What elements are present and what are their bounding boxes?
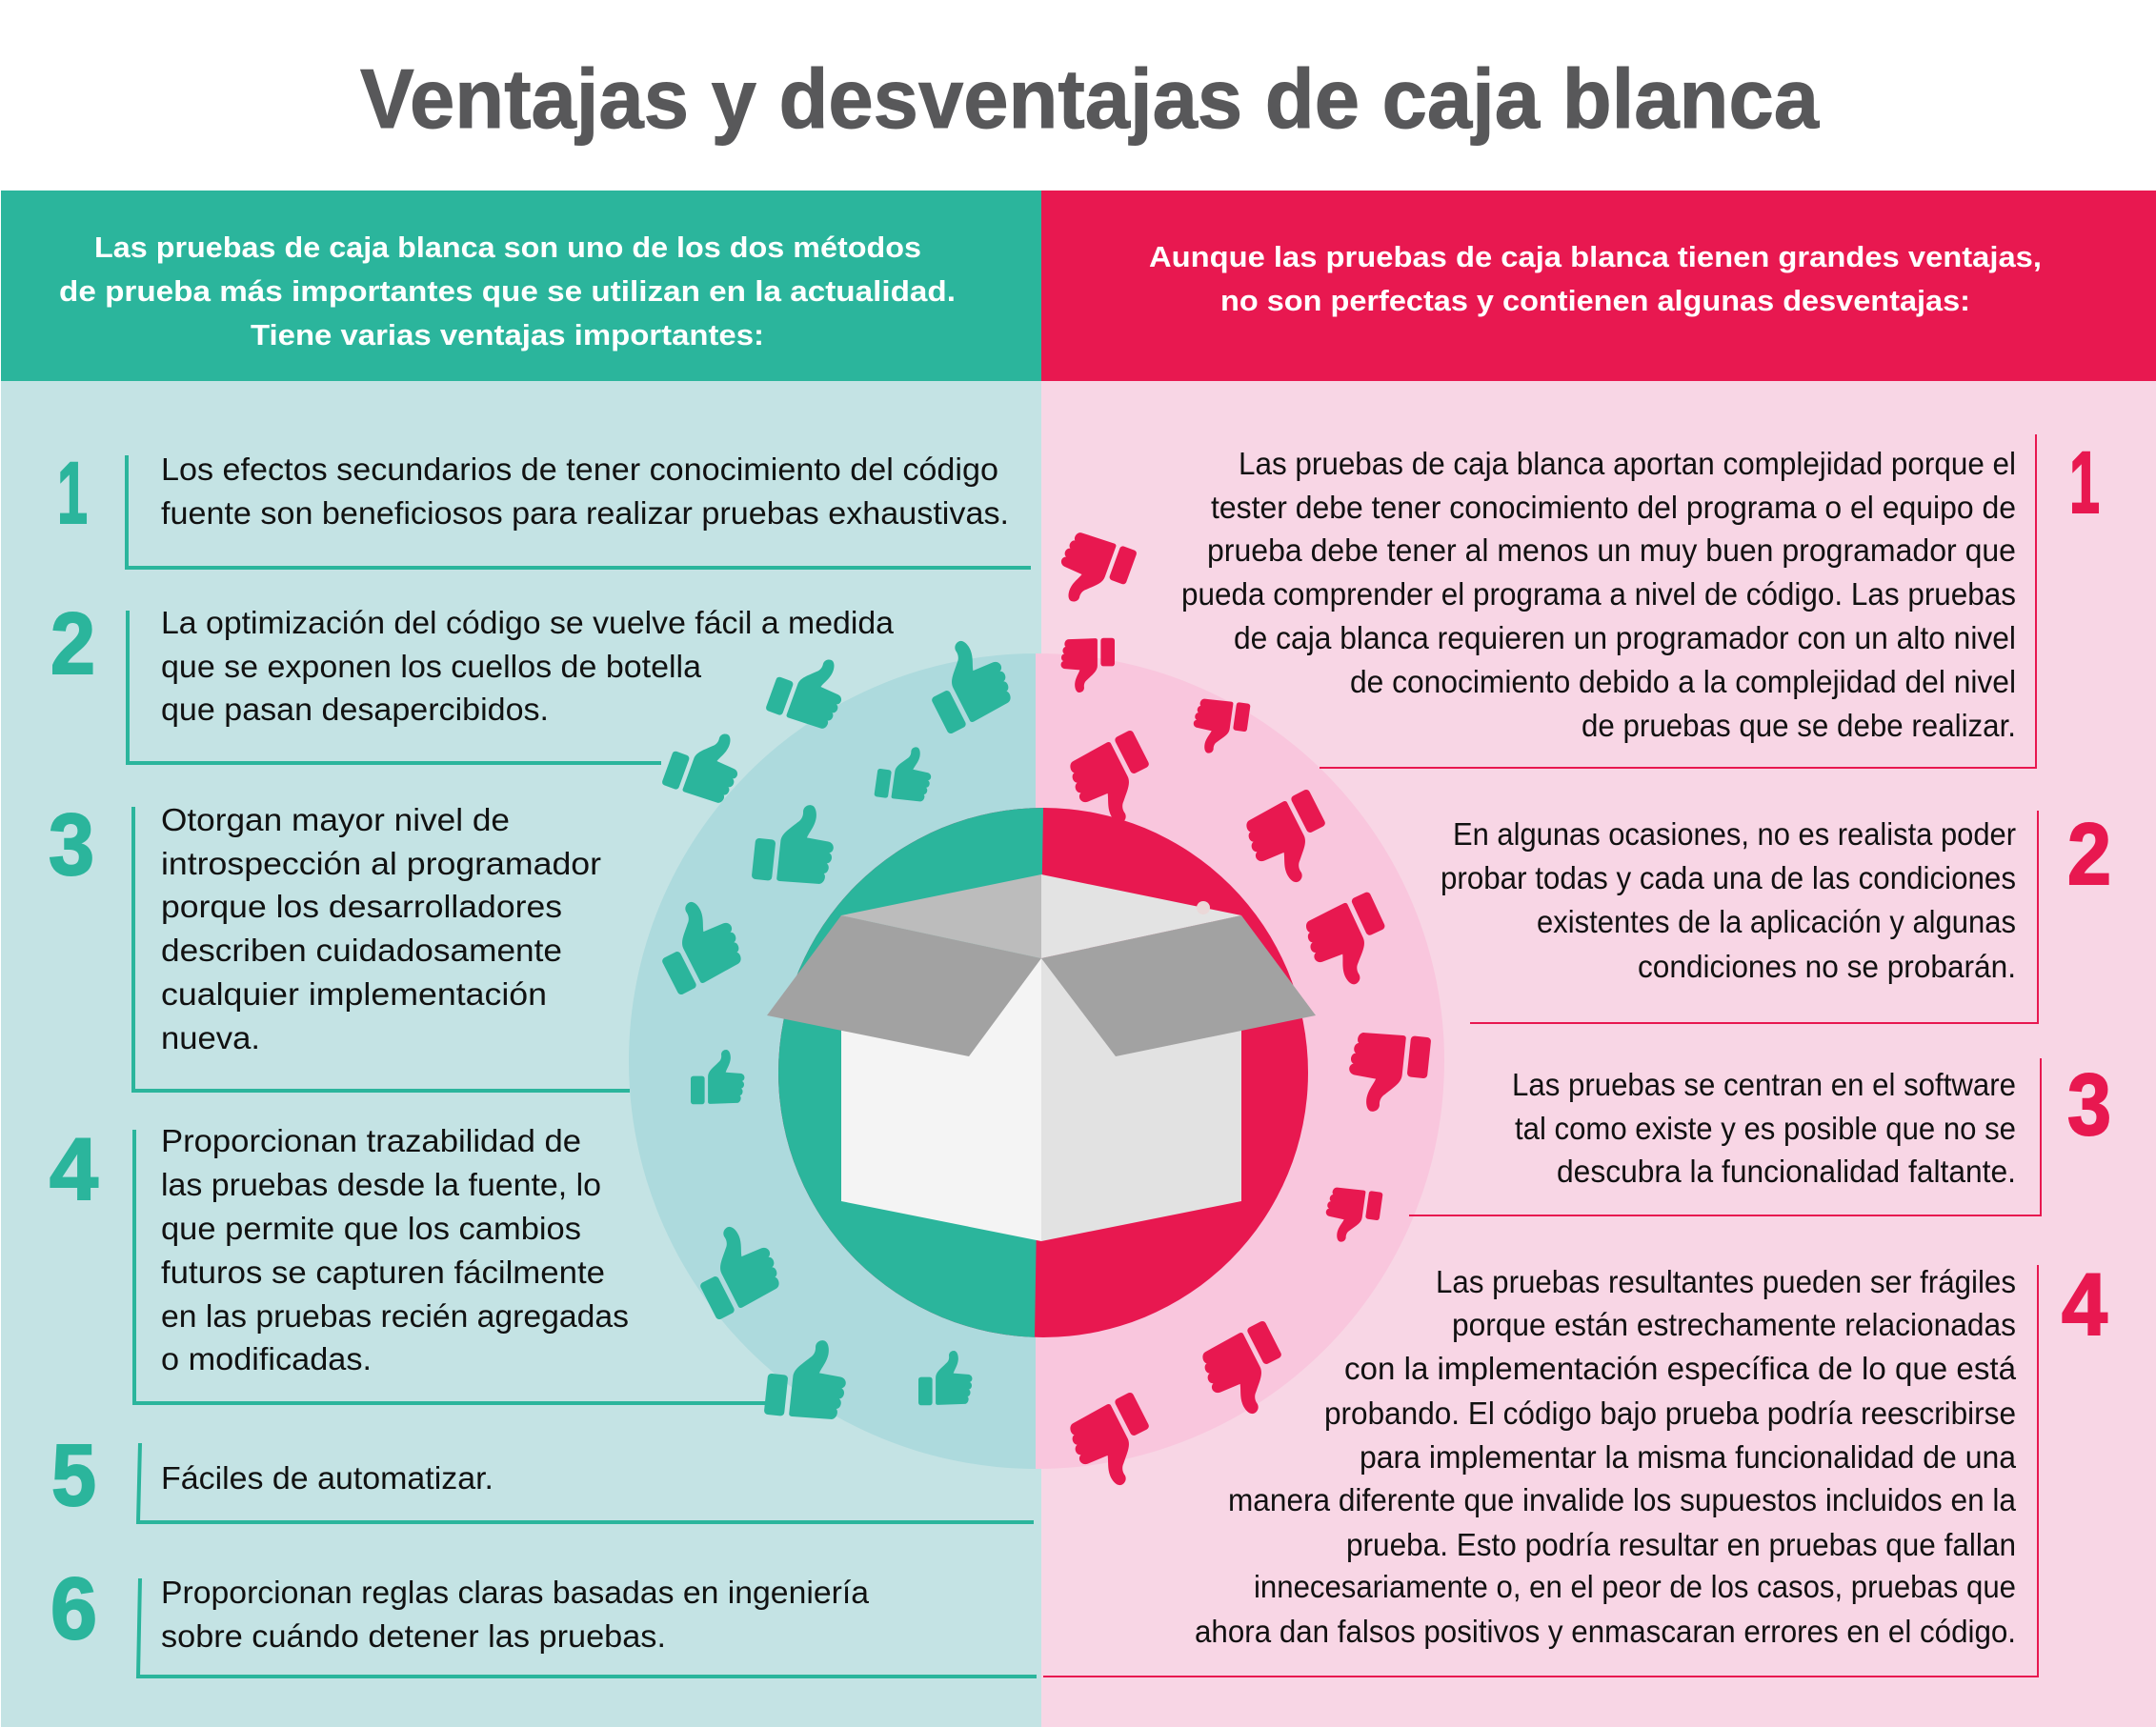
panel: disadvantages header: Aunque las pruebas de caja blanca tienen grandes ventajas, xyxy=(1149,240,2042,273)
text: disadvantage 4: con la implementación específica de lo que está xyxy=(1344,1351,2017,1386)
bracket: disadvantage 4 xyxy=(1043,1265,2038,1677)
text: advantage 1: Los efectos secundarios de tener conocimiento del código xyxy=(161,452,998,487)
icon: thumbs down 4 xyxy=(1062,730,1167,834)
icon: thumbs up 7 xyxy=(691,1050,744,1104)
text: disadvantage 3: Las pruebas se centran en el software xyxy=(1512,1067,2016,1102)
number 2 right: 2 xyxy=(2067,806,2111,903)
text: disadvantage 4: Las pruebas resultantes pueden ser frágiles xyxy=(1436,1264,2016,1299)
icon: thumbs up 1 xyxy=(914,630,1018,734)
text: disadvantage 1: Las pruebas de caja blanca aportan complejidad porque el xyxy=(1239,446,2016,481)
text: disadvantage 2: En algunas ocasiones, no es realista poder xyxy=(1453,816,2016,852)
icon: thumbs up 8 xyxy=(682,1215,787,1320)
text: disadvantage 1: de caja blanca requieren un programador con un alto nivel xyxy=(1234,620,2016,655)
icon: thumbs up 2 xyxy=(765,645,853,733)
text: advantage 3: nueva. xyxy=(161,1020,260,1055)
panel: advantages header: de prueba más importantes que se utilizan en la actualidad. xyxy=(59,274,956,308)
bracket: advantage 4 xyxy=(134,1130,766,1403)
icon: thumbs up 9 xyxy=(764,1335,850,1422)
text: disadvantage 4 xyxy=(1195,1264,2017,1649)
icon: thumbs down 10 xyxy=(1062,1392,1167,1496)
text: advantage 2: que se exponen los cuellos de botella xyxy=(161,649,702,684)
text: advantage 3: Otorgan mayor nivel de xyxy=(161,802,510,837)
bracket: advantage 6 xyxy=(138,1578,1037,1677)
icon: thumbs down 6 xyxy=(1299,891,1402,995)
text: advantage 3 xyxy=(161,802,601,1055)
text: advantage 2: que pasan desapercibidos. xyxy=(161,692,549,727)
icon: thumbs down 3 xyxy=(1190,696,1251,758)
text: advantage 1: fuente son beneficiosos para realizar pruebas exhaustivas. xyxy=(161,495,1009,531)
text: disadvantage 1: tester debe tener conocimiento del programa o el equipo de xyxy=(1211,490,2016,525)
icon: thumbs down 7 xyxy=(1345,1030,1431,1116)
panel: advantages header: Las pruebas de caja blanca son uno de los dos métodos xyxy=(94,231,921,264)
panel: advantages header xyxy=(1,191,1041,381)
text: disadvantage 4: probando. El código bajo prueba podría reescribirse xyxy=(1324,1396,2016,1431)
text: disadvantage 4: ahora dan falsos positivos y enmascaran errores en el código. xyxy=(1195,1614,2016,1649)
text: advantage 3: describen cuidadosamente xyxy=(161,933,562,968)
text: disadvantage 2: condiciones no se probarán. xyxy=(1638,949,2016,984)
text: advantage 6: Proporcionan reglas claras basadas en ingeniería xyxy=(161,1575,870,1610)
number 6 left: 6 xyxy=(50,1560,97,1657)
text: disadvantage 1: pueda comprender el programa a nivel de código. Las pruebas xyxy=(1181,576,2016,612)
icon: thumbs down 2 xyxy=(1061,638,1115,693)
text: advantage 4 xyxy=(161,1123,629,1376)
text: advantage 3: cualquier implementación xyxy=(161,976,547,1012)
icon: thumbs up 3 xyxy=(661,719,749,808)
text: disadvantage 4: manera diferente que invalide los supuestos incluidos en la xyxy=(1228,1482,2017,1517)
bracket: advantage 3 xyxy=(133,807,630,1091)
icon: thumbs up 10 xyxy=(918,1351,972,1405)
text: advantage 3: introspección al programador xyxy=(161,846,601,881)
central ring: left half xyxy=(629,653,1037,1469)
panel: disadvantages background xyxy=(1041,381,2156,1727)
number 5 left: 5 xyxy=(51,1427,96,1524)
bracket: advantage 2 xyxy=(128,611,661,763)
panel: advantages header: Tiene varias ventajas importantes: xyxy=(251,318,764,351)
text: advantage 4: que permite que los cambios xyxy=(161,1211,581,1246)
bracket: advantage 5 xyxy=(138,1443,1034,1522)
text: disadvantage 4: innecesariamente o, en el peor de los casos, pruebas que xyxy=(1254,1569,2016,1604)
central circle xyxy=(778,808,1308,1337)
title: Ventajas y desventajas de caja blanca xyxy=(360,51,1820,146)
icon: thumbs down 8 xyxy=(1322,1185,1383,1247)
text: advantage 4: en las pruebas recién agregadas xyxy=(161,1298,629,1334)
text: disadvantage 4: porque están estrechamente relacionadas xyxy=(1452,1307,2016,1342)
text: disadvantage 3: descubra la funcionalidad faltante. xyxy=(1557,1154,2016,1189)
text: disadvantage 2 xyxy=(1441,816,2016,984)
text: advantage 6: sobre cuándo detener las pruebas. xyxy=(161,1618,666,1654)
number 4 left: 4 xyxy=(50,1121,98,1218)
panel: advantages background xyxy=(1,381,1041,1727)
text: advantage 4: futuros se capturen fácilmente xyxy=(161,1255,605,1290)
text: advantage 6 xyxy=(161,1575,870,1654)
icon: thumbs up 5 xyxy=(752,800,837,887)
text: disadvantage 1: prueba debe tener al menos un muy buen programador que xyxy=(1207,532,2016,568)
icon: thumbs down 9 xyxy=(1195,1320,1300,1425)
text: disadvantage 2: existentes de la aplicación y algunas xyxy=(1537,904,2016,939)
text: advantage 2: La optimización del código se vuelve fácil a medida xyxy=(161,605,895,640)
bracket: disadvantage 2 xyxy=(1470,811,2038,1023)
icon: thumbs up 6 xyxy=(644,891,749,995)
panel: disadvantages header: no son perfectas y contienen algunas desventajas: xyxy=(1220,284,1970,317)
icon: thumbs up 4 xyxy=(874,742,935,804)
number 1 right: 1 xyxy=(2069,434,2100,532)
bracket: disadvantage 1 xyxy=(1320,434,2036,768)
panel: disadvantages header xyxy=(1041,191,2156,381)
text: advantage 4: las pruebas desde la fuente, lo xyxy=(161,1167,601,1202)
text: disadvantage 1 xyxy=(1181,446,2016,743)
text: disadvantage 1: de conocimiento debido a la complejidad del nivel xyxy=(1350,664,2016,699)
text: disadvantage 3: tal como existe y es posible que no se xyxy=(1515,1111,2016,1146)
bracket: advantage 1 xyxy=(127,455,1031,568)
central ring: right half xyxy=(1036,653,1444,1469)
text: disadvantage 1: de pruebas que se debe realizar. xyxy=(1582,708,2016,743)
bracket: disadvantage 3 xyxy=(1409,1058,2041,1215)
icon: open box xyxy=(767,874,1316,1241)
icon: thumbs down 1 xyxy=(1050,528,1138,616)
number 3 left: 3 xyxy=(49,796,94,894)
text: advantage 4: o modificadas. xyxy=(161,1341,372,1376)
text: disadvantage 4: para implementar la misma funcionalidad de una xyxy=(1360,1439,2017,1475)
number 4 right: 4 xyxy=(2062,1256,2107,1354)
number 3 right: 3 xyxy=(2067,1056,2111,1154)
icon: thumbs down 5 xyxy=(1239,789,1343,894)
text: disadvantage 4: prueba. Esto podría resultar en pruebas que fallan xyxy=(1346,1527,2016,1562)
text: advantage 3: porque los desarrolladores xyxy=(161,889,562,924)
text: disadvantage 3 xyxy=(1512,1067,2016,1189)
number 2 left: 2 xyxy=(50,595,95,693)
text: advantage 1 xyxy=(161,452,1009,531)
text: advantage 4: Proporcionan trazabilidad de xyxy=(161,1123,581,1158)
text: advantage 5: Fáciles de automatizar. xyxy=(161,1460,494,1496)
text: advantage 2 xyxy=(161,605,895,727)
text: disadvantage 2: probar todas y cada una de las condiciones xyxy=(1441,860,2016,895)
number 1 left: 1 xyxy=(57,445,88,542)
